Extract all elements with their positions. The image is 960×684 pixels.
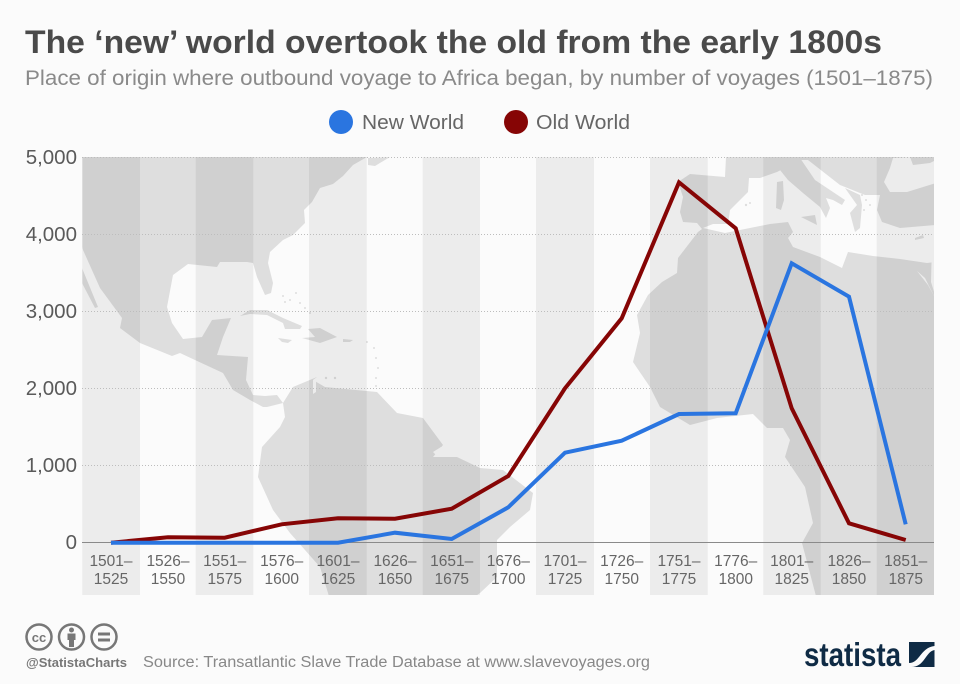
x axis labels: 1726–	[600, 553, 644, 570]
x axis labels: 1576–	[260, 553, 304, 570]
x axis labels: 1651–	[430, 553, 474, 570]
creative commons icons	[26, 624, 116, 650]
x axis labels: 1875	[888, 571, 923, 588]
alternating column bands	[82, 157, 934, 595]
x axis labels: 1600	[264, 571, 299, 588]
y axis labels: 5,000	[26, 146, 77, 169]
x axis labels: 1675	[434, 571, 469, 588]
x axis labels: 1825	[774, 571, 809, 588]
map: mediterranean sea	[703, 157, 936, 298]
legend: new world: New World	[362, 112, 464, 134]
logo wordmark: statista	[804, 636, 902, 673]
x axis labels: 1800	[718, 571, 753, 588]
source: Source: Transatlantic Slave Trade Database at www.slavevoyages.org	[143, 654, 650, 671]
x axis labels: 1750	[604, 571, 639, 588]
x axis labels: 1776–	[714, 553, 758, 570]
subtitle: Place of origin where outbound voyage to Africa began, by number of voyages (1501–1875)	[25, 67, 933, 90]
x axis labels: 1851–	[884, 553, 928, 570]
map: americas	[80, 150, 533, 600]
x axis labels: 1501–	[89, 553, 133, 570]
title: The ‘new’ world overtook the old from the early 1800s	[25, 24, 882, 60]
legend	[329, 110, 630, 134]
statista logo	[804, 636, 934, 673]
map: italy, greece and islands	[745, 158, 924, 240]
x axis labels: 1676–	[487, 553, 530, 570]
x axis labels: 1850	[832, 571, 867, 588]
x axis baseline	[82, 542, 934, 544]
icon: no derivatives	[92, 624, 116, 650]
x axis labels: 1701–	[543, 553, 587, 570]
x axis labels: 1626–	[373, 553, 417, 570]
icon: attribution	[59, 624, 84, 650]
y axis labels: 2,000	[26, 377, 77, 400]
x axis labels: 1700	[491, 571, 526, 588]
background world map	[80, 150, 940, 600]
x axis labels: 1650	[378, 571, 413, 588]
legend: old world: Old World	[536, 112, 630, 134]
x axis labels: 1526–	[146, 553, 190, 570]
x axis labels: 1525	[94, 571, 128, 588]
x axis labels: 1751–	[657, 553, 701, 570]
x axis labels: 1551–	[203, 553, 247, 570]
x axis labels: 1550	[151, 571, 186, 588]
map: europe and africa	[633, 157, 940, 600]
y axis labels: 3,000	[26, 300, 77, 323]
y axis labels: 1,000	[26, 454, 77, 477]
y axis labels: 0	[66, 531, 77, 554]
x axis labels: 1625	[321, 571, 355, 588]
x axis labels: 1775	[662, 571, 696, 588]
line: old world	[111, 182, 906, 543]
x axis labels: 1601–	[316, 553, 360, 570]
logo mark	[909, 642, 934, 667]
statista charts handle: @StatistaCharts	[26, 656, 127, 670]
x axis labels: 1725	[548, 571, 582, 588]
y axis labels	[26, 146, 77, 554]
x axis labels: 1826–	[827, 553, 871, 570]
y axis labels: 4,000	[26, 223, 77, 246]
gridlines	[82, 158, 934, 466]
legend: old world	[504, 110, 630, 134]
line: new world	[111, 263, 906, 543]
x axis labels	[89, 553, 928, 588]
icon: cc: cc	[32, 630, 46, 645]
x axis labels: 1801–	[770, 553, 814, 570]
legend: new world	[329, 110, 464, 134]
x axis labels: 1575	[207, 571, 242, 588]
